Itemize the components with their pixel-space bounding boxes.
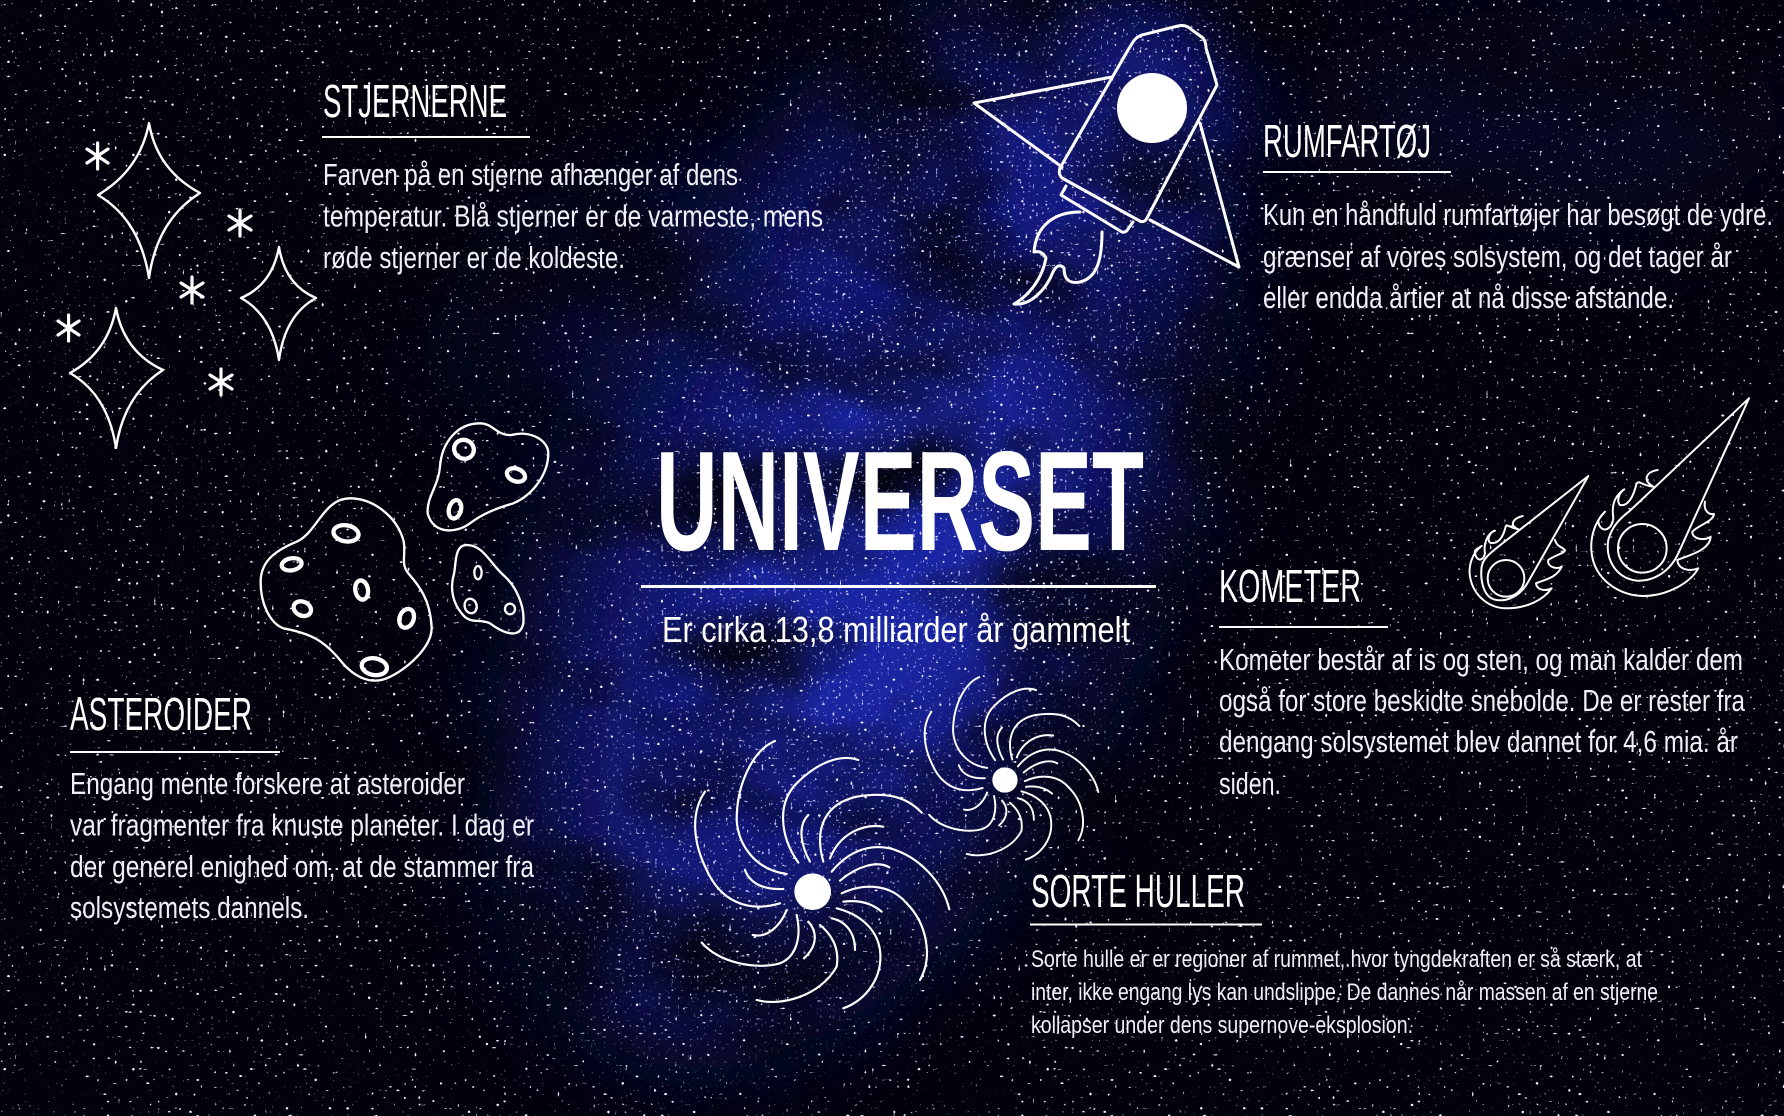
panel: kometer bbox=[1219, 398, 1749, 801]
body text: der generel enighed om, at de stammer fra bbox=[70, 849, 535, 884]
heading: ASTEROIDER bbox=[70, 688, 252, 740]
heading: STJERNERNE bbox=[323, 75, 507, 127]
body text bbox=[1031, 946, 1658, 1039]
body text bbox=[70, 766, 535, 925]
icon: black holes bbox=[695, 677, 1098, 1008]
panel: stjernerne bbox=[58, 75, 823, 448]
heading: RUMFARTØJ bbox=[1263, 115, 1431, 167]
panel: sorte huller bbox=[695, 677, 1658, 1039]
icon: rocket bbox=[974, 26, 1239, 304]
body text: siden. bbox=[1219, 766, 1281, 801]
body text: Sorte hulle er er regioner af rummet, hvor tyngdekraften er så stærk, at bbox=[1031, 946, 1642, 973]
body text bbox=[1219, 642, 1746, 801]
title block bbox=[641, 422, 1156, 650]
subtitle: Er cirka 13,8 milliarder år gammelt bbox=[662, 609, 1130, 650]
icon: comets bbox=[1470, 398, 1749, 608]
heading: SORTE HULLER bbox=[1031, 865, 1245, 917]
body text: eller endda årtier at nå disse afstande. bbox=[1263, 280, 1674, 315]
panel: asteroider bbox=[70, 423, 548, 925]
body text: solsystemets dannels. bbox=[70, 890, 309, 925]
heading: KOMETER bbox=[1219, 560, 1361, 612]
body text: kollapser under dens supernove-eksplosion. bbox=[1031, 1012, 1413, 1039]
body text: Farven på en stjerne afhænger af dens bbox=[323, 157, 738, 192]
icon: sparkling stars bbox=[58, 123, 316, 448]
body text bbox=[323, 157, 823, 275]
body text: temperatur. Blå stjerner er de varmeste, mens bbox=[323, 198, 823, 234]
body text: Engang mente forskere at asteroider bbox=[70, 766, 465, 801]
panel: rumfartøj bbox=[974, 26, 1773, 315]
title: UNIVERSET bbox=[656, 422, 1144, 581]
body text: røde stjerner er de koldeste. bbox=[323, 240, 625, 275]
body text: var fragmenter fra knuste planeter. I dag er bbox=[70, 808, 534, 842]
body text bbox=[1263, 197, 1773, 315]
icon: asteroids bbox=[261, 423, 548, 681]
